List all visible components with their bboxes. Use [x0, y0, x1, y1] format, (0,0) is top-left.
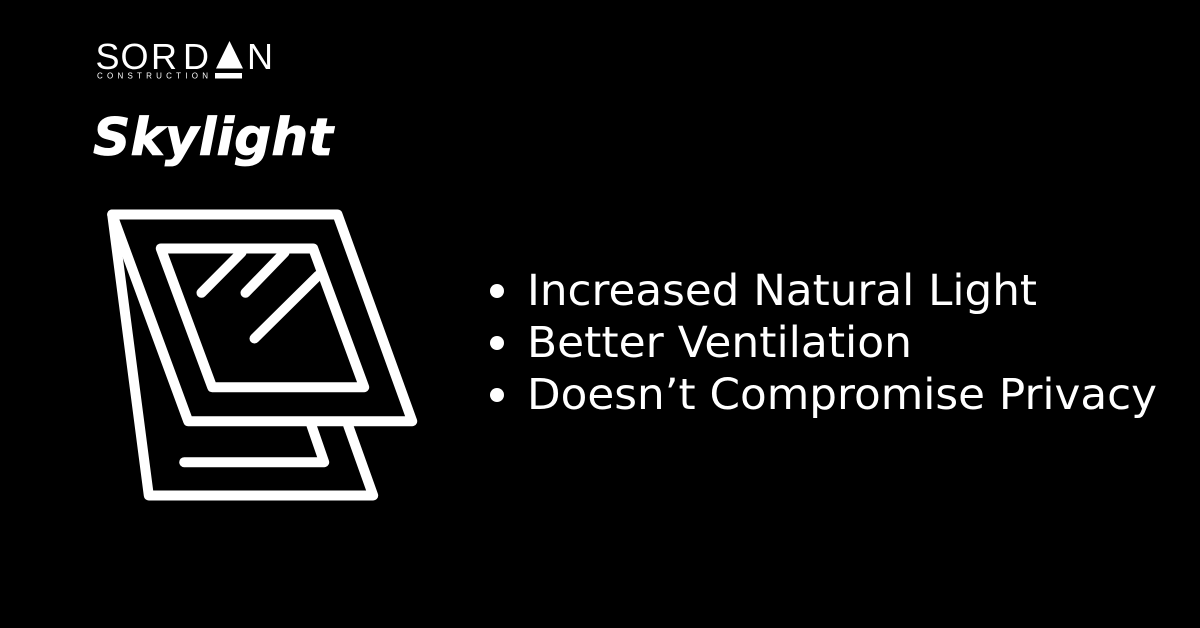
icon: skylight window [112, 214, 412, 496]
bullet 2: Better Ventilation [527, 318, 912, 368]
logo bar [215, 73, 242, 78]
logo letter N: N [247, 36, 273, 77]
logo: Sordan Construction [96, 36, 273, 80]
logo wordmark letters: SORD [96, 36, 209, 77]
logo triangle [216, 41, 243, 68]
bullet 3: Doesn’t Compromise Privacy [527, 370, 1157, 420]
glass reflection lines [202, 252, 318, 338]
bullet 1: Increased Natural Light [527, 266, 1037, 316]
logo subtitle: CONSTRUCTION [97, 72, 208, 80]
back panel [112, 214, 373, 496]
outer frame [112, 214, 412, 421]
title: Skylight [93, 108, 335, 168]
bullet list [490, 266, 1157, 420]
inner glass pane [161, 248, 364, 387]
